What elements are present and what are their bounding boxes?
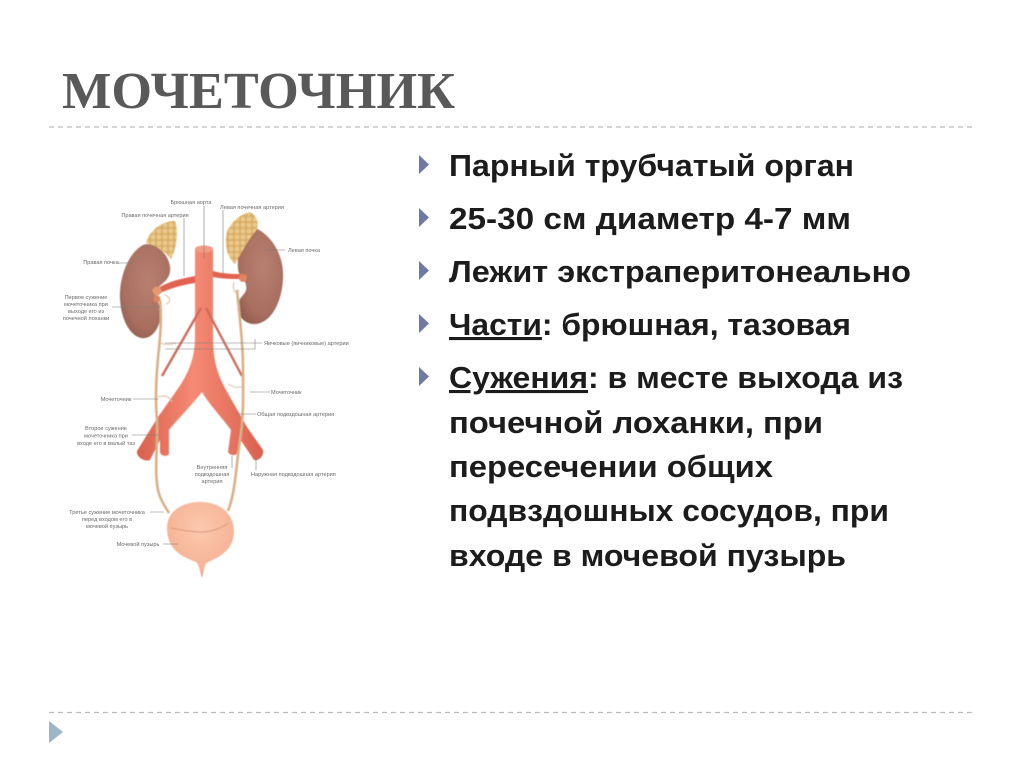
bullet 2: 25-30 см диаметр 4-7 мм: [449, 201, 851, 236]
label: ureter left: Мочеточник: [101, 397, 132, 403]
title: МОЧЕТОЧНИК: [62, 63, 455, 120]
bullet 5: Сужения: в месте выхода из: [449, 360, 903, 395]
icon: right adrenal gland: [146, 221, 177, 259]
bullet 5: входе в мочевой пузырь: [449, 538, 846, 573]
bullet 5: подвздошных сосудов, при: [449, 493, 889, 528]
label: first narrowing: выходе его из: [68, 309, 104, 315]
label: ureter right: Мочеточник: [271, 390, 302, 396]
label: external iliac artery: Наружная подвздошная артерия: [251, 472, 336, 478]
anatomical diagram: urinary tract: [63, 200, 349, 578]
icon: footer triangle: [49, 721, 63, 743]
icon: renal arteries: [158, 271, 243, 293]
label: third narrowing: мочевой пузырь: [86, 523, 128, 530]
label: third narrowing: Третье сужение мочеточника: [69, 510, 146, 516]
label: left renal artery: Левая почечная артерия: [220, 205, 284, 211]
label: second narrowing: Второе сужение: [85, 426, 127, 432]
icon: left kidney: [238, 228, 283, 324]
icon: bladder: [167, 502, 234, 578]
icon: ureters: [156, 300, 169, 513]
label: right renal artery: Правая почечная артерия: [121, 213, 189, 219]
label: third narrowing: перед входом его в: [82, 517, 132, 523]
label: right kidney: Правая почка: [83, 260, 120, 266]
label: second narrowing: мочеточника при: [84, 434, 128, 440]
label: internal iliac artery: артерия: [202, 479, 222, 485]
label: gonadal arteries: Яичковые (яичниковые) артерии: [264, 341, 349, 347]
icon: gonadal arteries: [162, 308, 201, 376]
label: common iliac artery: Общая подвздошная артерия: [257, 412, 334, 418]
label: first narrowing: Первое сужение: [65, 295, 107, 301]
icon: left adrenal gland: [226, 212, 258, 264]
label: left kidney: Левая почка: [288, 248, 321, 254]
label: first narrowing: мочеточника при: [64, 302, 108, 308]
bullet 5: [419, 360, 903, 573]
bullet 4: Части: брюшная, тазовая: [449, 307, 851, 342]
label: internal iliac artery: подвздошная: [195, 472, 229, 478]
leader lines: [112, 206, 285, 544]
icon: right kidney: [120, 244, 170, 338]
bullet 5: пересечении общих: [449, 449, 774, 484]
bullet list: [419, 148, 911, 573]
label: first narrowing: почечной лоханки: [63, 315, 109, 322]
label: second narrowing: входе его в малый таз: [77, 440, 135, 447]
icon: aorta and iliac arteries: [137, 246, 263, 461]
label: internal iliac artery: Внутренняя: [197, 465, 227, 471]
bullet 5: почечной лоханки, при: [449, 405, 823, 440]
anatomical labels: [63, 200, 349, 548]
label: bladder: Мочевой пузырь: [117, 541, 160, 548]
bullet 1: Парный трубчатый орган: [449, 148, 854, 183]
label: abdominal aorta: Брюшная аорта: [170, 200, 212, 206]
artwork: organs and vessels: [120, 212, 283, 578]
bullet 3: Лежит экстраперитонеально: [449, 254, 911, 289]
